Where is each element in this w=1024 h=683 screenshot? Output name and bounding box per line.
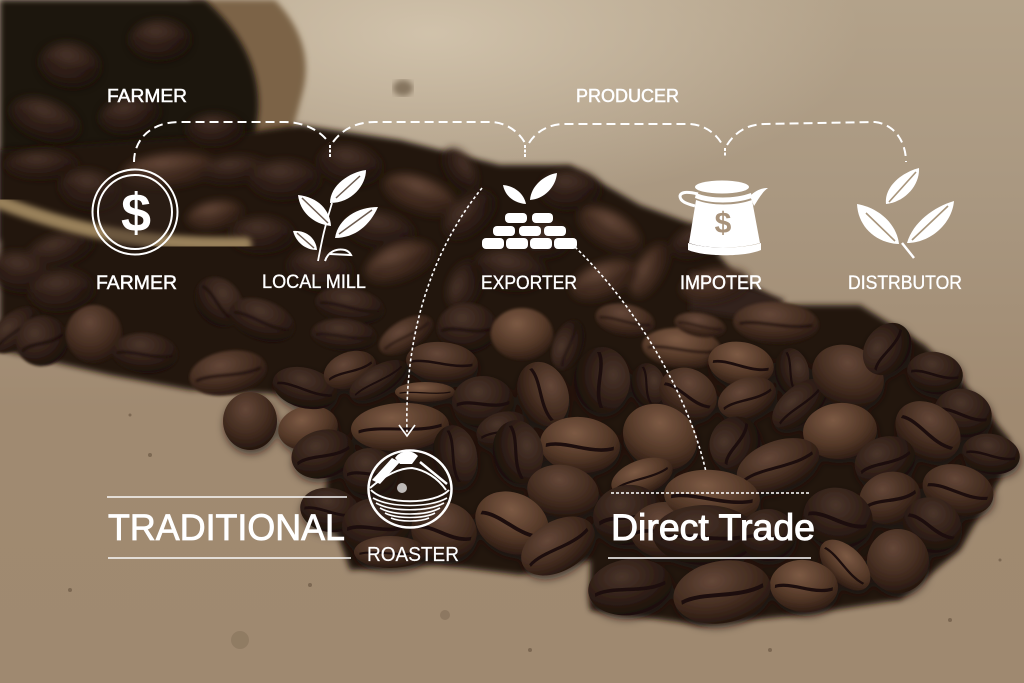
- sharp near beans: [223, 313, 1023, 631]
- heading: Direct Trade: Direct Trade: [611, 507, 815, 548]
- top label: PRODUCER: PRODUCER: [576, 86, 679, 106]
- icon: distributor leaves: [857, 168, 954, 258]
- label: ROASTER: ROASTER: [367, 544, 459, 566]
- dotted line: exporter to direct trade: [575, 247, 706, 472]
- icon: importer pot: [680, 180, 768, 255]
- far blurred beans: [0, 20, 751, 315]
- dotted arrow: exporter to roaster: [399, 188, 482, 436]
- label: EXPORTER: EXPORTER: [481, 273, 577, 294]
- icon: farmer coin: [92, 170, 178, 254]
- icon: roaster basket: [368, 450, 452, 528]
- icon: local mill plant: [293, 170, 378, 261]
- heading: TRADITIONAL: TRADITIONAL: [108, 507, 345, 548]
- dashed flow arrows across the top: [134, 122, 906, 162]
- heading: TRADITIONAL: [107, 497, 351, 558]
- label: FARMER: FARMER: [96, 273, 177, 294]
- label: IMPOTER: IMPOTER: [680, 273, 762, 294]
- icon: importer pot: $: [715, 207, 732, 240]
- label: LOCAL MILL: LOCAL MILL: [262, 272, 366, 293]
- rope: [0, 202, 245, 244]
- label: DISTRBUTOR: DISTRBUTOR: [848, 273, 962, 294]
- top label: FARMER: FARMER: [107, 86, 187, 106]
- mid beans: [0, 267, 820, 401]
- icon: exporter bricks and sprout: [482, 173, 577, 249]
- icon: farmer coin: $: [121, 183, 151, 243]
